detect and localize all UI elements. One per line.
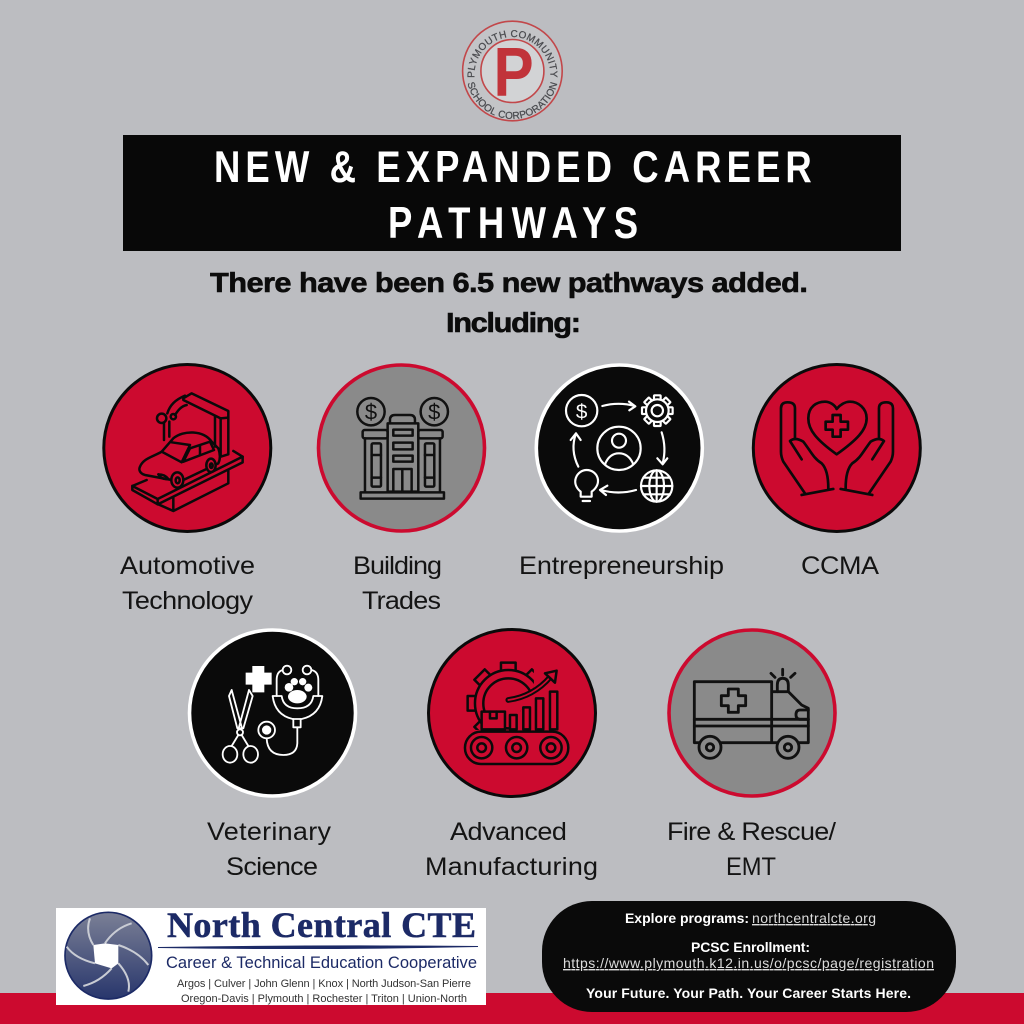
links pill	[542, 901, 956, 1012]
North Central CTE logo: North Central CTE	[167, 905, 476, 945]
panel: automotive technology	[104, 364, 271, 615]
title banner: PATHWAYS	[388, 198, 638, 248]
label: Science	[226, 852, 318, 881]
school logo: PLYMOUTH COMMUNITY	[467, 30, 558, 78]
title banner	[123, 135, 901, 251]
label: Trades	[362, 586, 441, 615]
icon: entrepreneurship cycle: $	[576, 400, 588, 423]
label: Fire & Rescue/	[667, 817, 837, 846]
bottom red band	[0, 993, 1024, 1024]
panel: veterinary science	[190, 630, 356, 881]
label	[120, 551, 255, 615]
icon: building with coins: $	[365, 400, 377, 425]
North Central CTE logo: Career & Technical Education Cooperative	[166, 954, 477, 972]
icon: veterinary tools	[223, 666, 322, 763]
links pill: https://www.plymouth.k12.in.us/o/pcsc/page/registration	[563, 955, 934, 971]
icon: camera aperture	[65, 912, 152, 999]
panel: building trades	[318, 365, 484, 615]
label: CCMA	[801, 551, 880, 580]
subheading: There have been 6.5 new pathways added.	[210, 267, 808, 299]
icon: building with coins	[357, 398, 448, 499]
label: Building	[353, 551, 442, 580]
subheading	[210, 267, 808, 339]
panel: CCMA	[753, 364, 920, 580]
icon: ambulance	[694, 669, 808, 758]
North Central CTE logo	[56, 905, 486, 1005]
label: Entrepreneurship	[519, 551, 724, 580]
North Central CTE logo: Oregon-Davis | Plymouth | Rochester | Triton | Union-North	[181, 993, 467, 1005]
icon: car on assembly line	[132, 393, 243, 511]
school logo	[462, 20, 563, 122]
subheading: Including:	[446, 307, 581, 339]
links pill: northcentralcte.org	[752, 910, 876, 926]
title banner: NEW & EXPANDED CAREER	[214, 142, 812, 192]
North Central CTE logo: Argos | Culver | John Glenn | Knox | North Judson-San Pierre	[177, 978, 471, 990]
panel: advanced manufacturing	[425, 630, 598, 881]
links pill: Explore programs:	[625, 910, 749, 926]
panel: fire and rescue EMT	[667, 630, 837, 881]
links pill: PCSC Enrollment:	[691, 939, 810, 955]
icon: entrepreneurship cycle	[566, 395, 673, 502]
label	[353, 551, 442, 615]
label	[667, 817, 837, 881]
links pill: Your Future. Your Path. Your Career Starts Here.	[586, 985, 911, 1001]
label: Advanced	[450, 817, 567, 846]
school logo: SCHOOL CORPORATION	[468, 82, 558, 120]
school logo: P	[494, 33, 534, 111]
label: EMT	[726, 853, 776, 881]
panel: entrepreneurship	[519, 365, 724, 580]
label: Veterinary	[207, 817, 331, 846]
label: Automotive	[120, 551, 255, 580]
label: Technology	[122, 586, 253, 615]
label	[207, 817, 331, 881]
icon: gear, chart and conveyor	[465, 663, 568, 764]
label: Manufacturing	[425, 852, 598, 881]
icon: hands holding heart	[781, 402, 893, 495]
icon: building with coins: $	[428, 400, 440, 425]
label	[425, 817, 598, 881]
